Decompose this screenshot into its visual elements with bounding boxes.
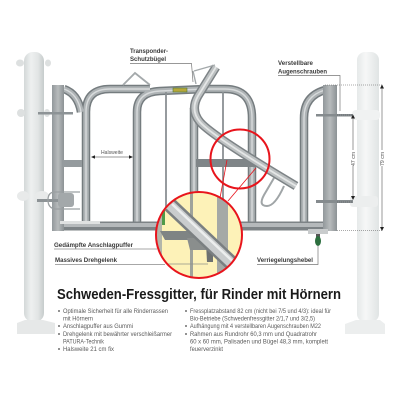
transponder protection bar xyxy=(193,65,296,186)
feature list: left column: Optimale Sicherheit für alle Rinderrassen xyxy=(63,308,168,315)
locking lever xyxy=(308,229,328,246)
label: Massives Drehgelenk: Massives Drehgelenk xyxy=(55,257,118,264)
transponder triangle bracket xyxy=(123,73,150,85)
feature list: right column: Fressplatzabstand 82 cm (nicht bei 7/5 und 4/3): ideal für xyxy=(190,308,331,315)
feature list: right column: feuerverzinkt xyxy=(190,346,223,353)
label: Massives Drehgelenk xyxy=(55,257,165,264)
feature list: left column: Anschlagpuffer aus Gummi xyxy=(63,323,133,330)
feature list: left column: mit Hörnern xyxy=(63,316,93,322)
feature list: right column: Bio-Betriebe (Schwedenfressgitter 2/1,7 und 3/2,5) xyxy=(190,316,315,322)
feature list: right column xyxy=(185,308,331,353)
dimension: 79 cm: 79 cm xyxy=(380,152,386,166)
feature list: right column: 60 x 60 mm, Palisaden und Bügel 48,3 mm, komplett xyxy=(190,338,328,346)
large magnified circle xyxy=(155,190,245,285)
right post xyxy=(345,52,385,334)
label: Verstellbare Augenschrauben: Augenschrauben xyxy=(278,68,327,76)
label: Transponder-Schutzbügel: Schutzbügel xyxy=(130,56,166,63)
feature list: right column: Aufhängung mit 4 verstellbaren Augenschrauben M22 xyxy=(190,323,322,330)
middle crossbar xyxy=(196,159,256,167)
feature list: left column: Drehgelenk mit bewährter verschleißarmer xyxy=(63,331,172,338)
label: Halsweite dimension xyxy=(91,150,133,159)
dimension: 79 cm xyxy=(325,84,386,231)
red connector lines xyxy=(220,160,256,201)
feature list: left column xyxy=(58,308,172,353)
feature list: right column: Rahmen aus Rundrohr 60,3 mm und Quadratrohr xyxy=(190,331,317,338)
label: Verriegelungshebel xyxy=(257,246,318,264)
label: Transponder-Schutzbügel xyxy=(130,48,193,82)
galvanized gate frame xyxy=(60,89,326,226)
label: Transponder-Schutzbügel: Transponder- xyxy=(130,48,168,55)
label: Halsweite dimension: Halsweite xyxy=(101,150,123,156)
label: Gedämpfte Anschlagpuffer: Gedämpfte Anschlagpuffer xyxy=(54,242,134,249)
feature list: left column: PATURA-Technik xyxy=(63,338,105,346)
U-shaped handle xyxy=(262,178,284,206)
PATURA plate xyxy=(173,88,187,92)
dimension: 47 cm: 47 cm xyxy=(351,152,357,166)
feature list: left column: Halsweite 21 cm fix xyxy=(63,346,114,353)
label: Verriegelungshebel: Verriegelungshebel xyxy=(257,257,313,264)
left mounting plate xyxy=(52,85,64,231)
right mounting plate xyxy=(323,85,337,231)
small red detail circle xyxy=(210,130,270,188)
label: Verstellbare Augenschrauben: Verstellbare xyxy=(278,60,314,67)
label: Verstellbare Augenschrauben xyxy=(278,60,340,111)
left post xyxy=(16,52,55,334)
dimension: 47 cm xyxy=(337,114,357,202)
title: Schweden-Fressgitter, für Rinder mit Hörnern xyxy=(57,287,341,303)
bolts and hinges xyxy=(37,112,353,224)
